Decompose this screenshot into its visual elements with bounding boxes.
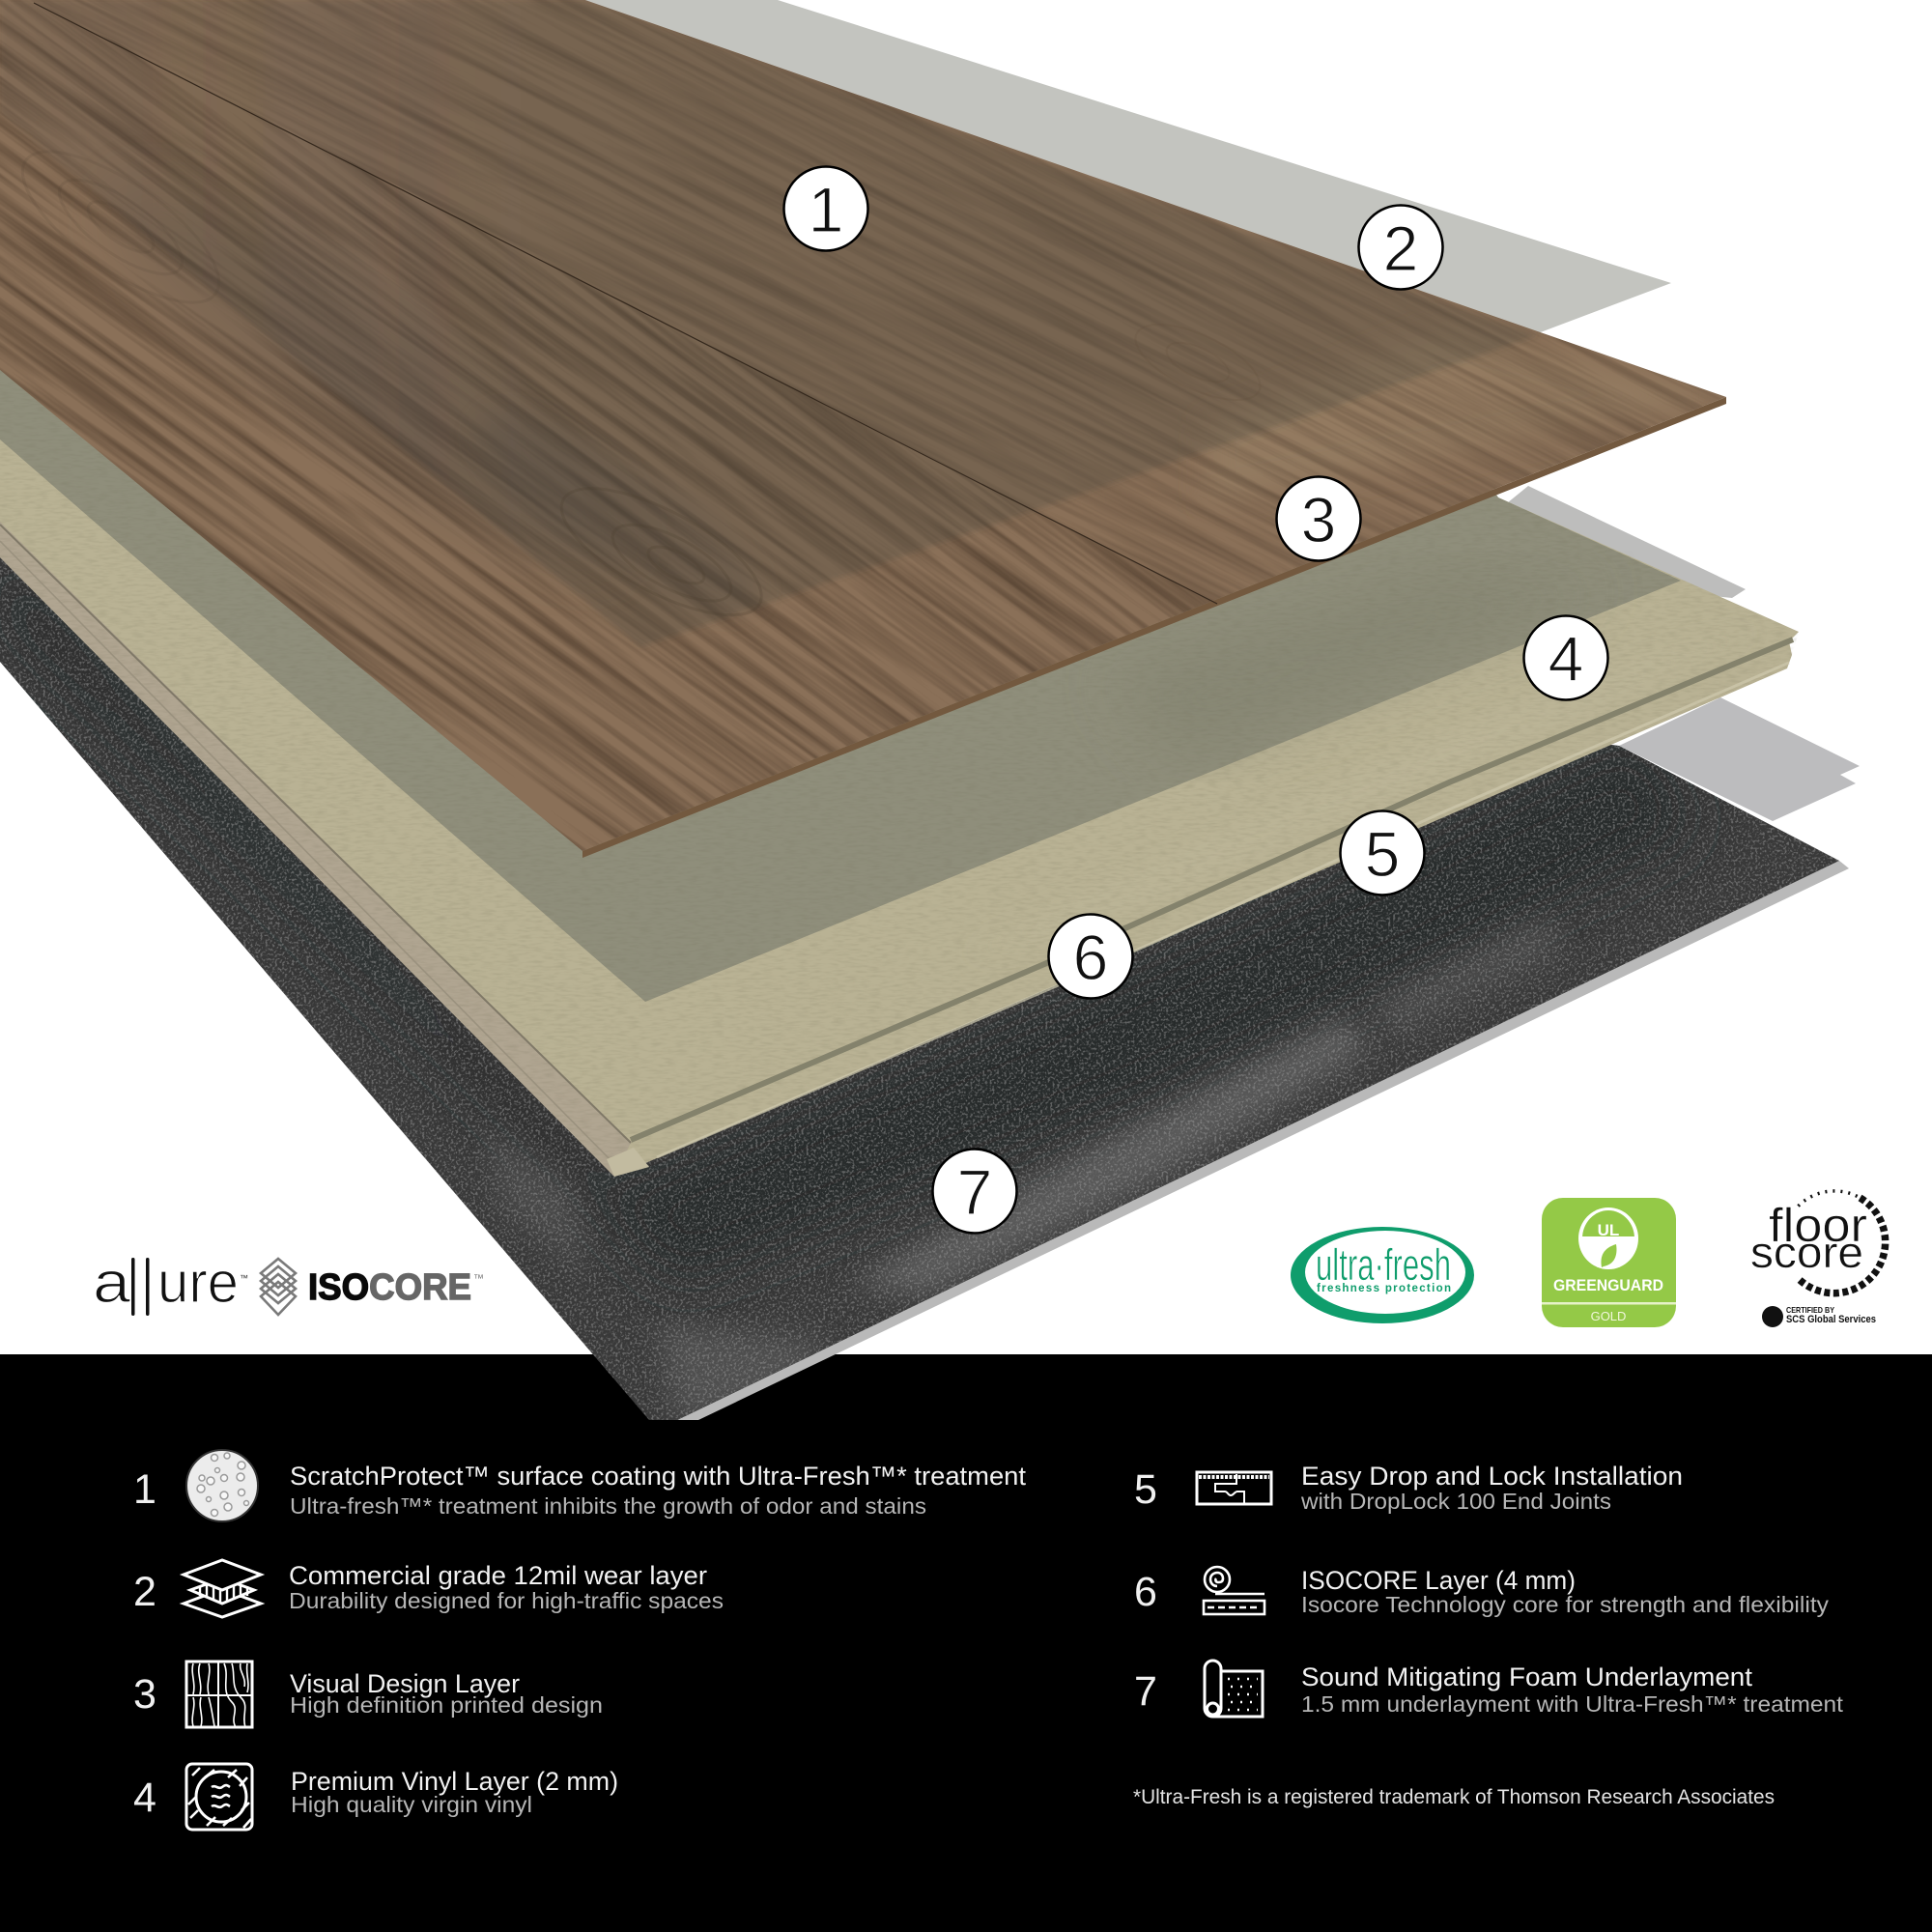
icon: surface droplets: [186, 1450, 258, 1521]
callout 3: [1277, 477, 1360, 560]
footnote: *Ultra-Fresh is a registered trademark of Thomson Research Associates: [1133, 1786, 1775, 1808]
title: Commercial grade 12mil wear layer: [289, 1561, 707, 1590]
logo: floorscore: CERTIFIED BY: [1786, 1305, 1834, 1315]
legend item 7: [1134, 1661, 1843, 1717]
front corner tongue: [607, 1148, 649, 1177]
layer 2 wear layer behind plank: [585, 0, 1671, 333]
logo: greenguard gold: GREENGUARD: [1553, 1276, 1663, 1294]
logo: ultra-fresh: ultra·fresh: [1316, 1239, 1451, 1290]
icon: roll and core board: [1204, 1567, 1264, 1614]
callout 5: [1341, 811, 1424, 895]
title: ISOCORE Layer (4 mm): [1301, 1566, 1576, 1595]
logo: allure: ™: [240, 1273, 248, 1283]
wood knot left: [23, 155, 149, 291]
callout 5: 5: [1365, 818, 1400, 890]
legend item 2: [133, 1560, 724, 1617]
logo: floorscore: score: [1750, 1228, 1863, 1277]
callout 4: 4: [1548, 623, 1583, 695]
callout 6: 6: [1073, 922, 1108, 993]
logo: floorscore: floor: [1769, 1200, 1867, 1252]
logo: floorscore: [1750, 1191, 1886, 1327]
layer 3 wood visual design plank: [0, 0, 1726, 858]
logo: isocore wordmark: ISOCORE: [308, 1267, 471, 1308]
left tongue strip: [0, 522, 631, 1177]
isocore trademark: ™: [473, 1273, 484, 1285]
description: High quality virgin vinyl: [291, 1792, 532, 1817]
legend item 7: 7: [1134, 1668, 1157, 1715]
callout 2: 2: [1383, 213, 1418, 284]
description: Ultra-fresh™* treatment inhibits the growth of odor and stains: [290, 1493, 926, 1519]
legend item 5: 5: [1134, 1466, 1157, 1513]
description: with DropLock 100 End Joints: [1300, 1489, 1611, 1514]
grey shadow behind foam: [1619, 697, 1860, 821]
logo: floorscore: SCS Global Services: [1786, 1314, 1876, 1325]
exploded flooring layers illustration: [0, 0, 1884, 1430]
legend item 2: 2: [133, 1569, 156, 1615]
title: Sound Mitigating Foam Underlayment: [1301, 1662, 1753, 1691]
layer 7 foam underlayment: [0, 541, 1884, 1430]
legend item 6: 6: [1134, 1569, 1157, 1615]
logo: greenguard gold: [1542, 1198, 1676, 1327]
logo: greenguard gold: GOLD: [1591, 1309, 1626, 1323]
layers 4 to 6 core and vinyl board: [0, 370, 1799, 1177]
logo: allure: ure: [157, 1250, 239, 1315]
wood knot right: [1125, 309, 1270, 415]
icon: vinyl circle: [186, 1764, 252, 1830]
callout 7: 7: [957, 1156, 992, 1228]
callout 7: [933, 1150, 1016, 1233]
description: Isocore Technology core for strength and flexibility: [1301, 1592, 1829, 1617]
logo: isocore diamond mark: [261, 1259, 296, 1315]
description: Durability designed for high-traffic spaces: [289, 1588, 724, 1613]
title: Easy Drop and Lock Installation: [1301, 1462, 1683, 1491]
legend item 1: 1: [133, 1466, 156, 1513]
callout 1: 1: [809, 174, 843, 245]
legend item 4: 4: [133, 1775, 156, 1821]
groove line along front edge: [631, 639, 1793, 1140]
grey shadow behind core: [1502, 486, 1746, 598]
logo: allure: [93, 1250, 248, 1316]
title: Premium Vinyl Layer (2 mm): [291, 1767, 618, 1796]
logo: ultra-fresh: freshness protection: [1317, 1283, 1451, 1294]
wood knot centre: [618, 503, 763, 616]
icon: droplock joint: [1197, 1472, 1271, 1504]
logo: ultra-fresh: [1291, 1227, 1474, 1323]
logo: greenguard gold: UL: [1598, 1221, 1619, 1239]
legend item 6: [1134, 1566, 1829, 1617]
title: ScratchProtect™ surface coating with Ultra-Fresh™* treatment: [290, 1462, 1026, 1491]
callout 6: [1049, 914, 1132, 999]
description: High definition printed design: [290, 1692, 603, 1718]
icon: wood grain: [186, 1662, 252, 1727]
legend item 4: [133, 1764, 618, 1830]
legend item 1: [133, 1450, 1026, 1521]
callout 1: [784, 166, 867, 251]
callout 2: [1358, 205, 1443, 290]
callout 4: [1524, 616, 1607, 699]
icon: foam roll: [1205, 1661, 1263, 1717]
black legend panel: [0, 1354, 1932, 1932]
icon: wear layer stack: [184, 1560, 261, 1617]
dark wear layer overlay on plank: [0, 0, 1538, 647]
legend item 3: 3: [133, 1671, 156, 1718]
title: Visual Design Layer: [290, 1669, 520, 1698]
groove line along left edge: [0, 525, 631, 1143]
legend item 5: [1134, 1462, 1683, 1514]
plank seam: [34, 3, 1217, 604]
description: 1.5 mm underlayment with Ultra-Fresh™* treatment: [1301, 1691, 1843, 1717]
top surface shade overlay: [0, 290, 1681, 1002]
legend item 3: [133, 1662, 603, 1727]
logo: allure: a: [93, 1250, 131, 1315]
callout 3: 3: [1301, 484, 1336, 555]
